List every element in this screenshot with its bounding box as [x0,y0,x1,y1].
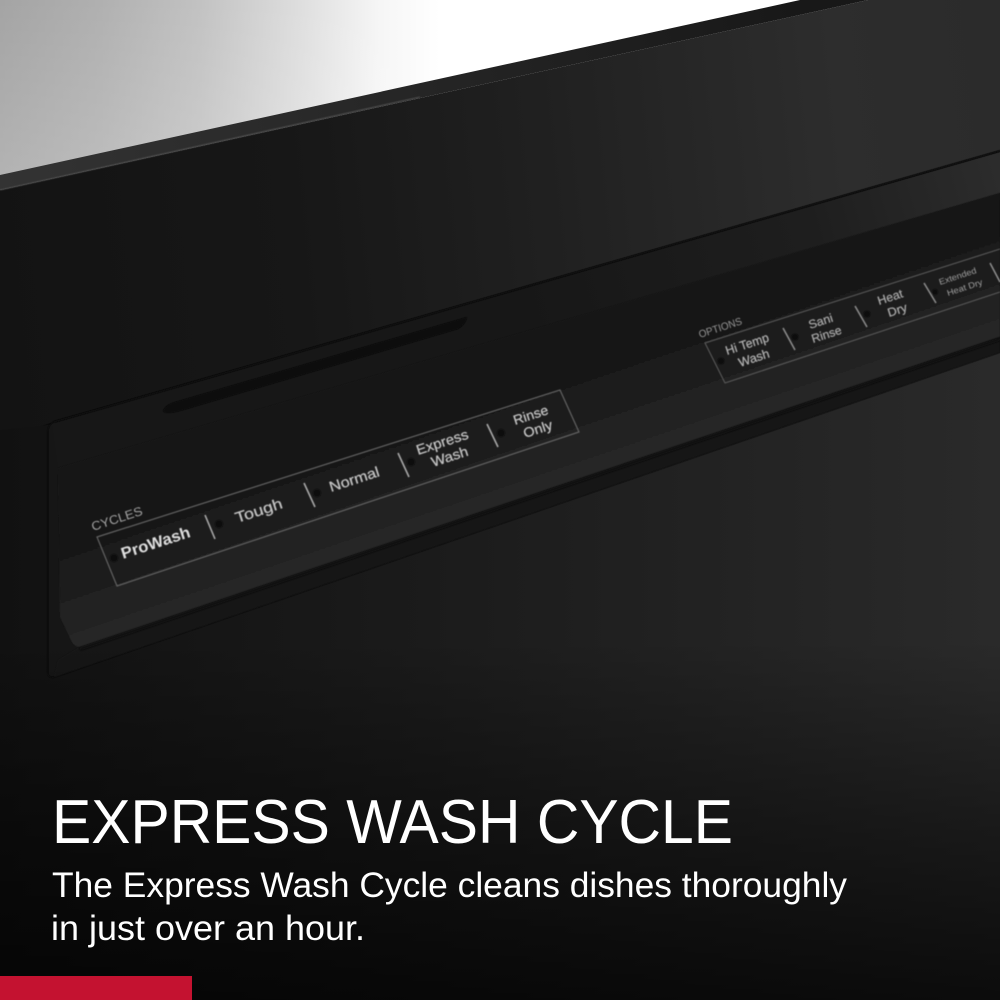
divider [304,483,315,507]
option: Hi Temp Wash [718,331,771,370]
panel: options [698,249,1000,383]
options label: OPTIONS [698,316,744,341]
door top trim [0,0,868,190]
cycle: ProWash: ProWash [119,524,193,563]
option: Heat Dry: Dry [886,300,909,320]
handle slit [163,317,467,413]
description: The Express Wash Cycle cleans dishes thoroughly [52,866,848,905]
panel edge shadow [80,339,1000,649]
divider [398,453,409,477]
option: Extended Heat Dry [932,265,985,298]
description [51,866,848,948]
divider [855,306,867,327]
lip top shadow line [54,151,1000,422]
option: Heat Dry [864,286,909,320]
control panel face [58,193,1000,647]
panel: cycles [90,390,579,586]
cycles label: CYCLES [90,504,144,534]
option: Sani Rinse [792,311,844,346]
option: Hi Temp Wash: Hi Temp [724,331,771,358]
background wall [0,0,1000,200]
title: EXPRESS WASH CYCLE [52,788,733,857]
cycle: Rinse Only: Rinse [511,402,550,428]
cycle: Normal: Normal [327,464,382,496]
control panel frame [48,151,1000,677]
red accent bar [0,976,192,1000]
option: Heat Dry: Heat [876,286,905,308]
option: Extended Heat Dry: Heat Dry [946,277,985,298]
options outline [705,249,1000,383]
cycle: Tough: Tough [233,495,285,527]
lower frame band [54,337,1000,677]
divider [783,328,795,350]
cycle: Express Wash: Wash [429,443,470,470]
control lip [52,152,1000,468]
description: in just over an hour. [51,909,365,948]
cycle: Express Wash: Express [414,426,470,458]
cycle: Express Wash [407,426,470,470]
divider [990,263,1000,282]
divider [924,283,936,303]
divider [487,424,498,447]
divider [205,515,215,539]
bottom dark overlay [0,640,1000,1000]
door lower face [0,330,1000,1000]
option: Hi Temp Wash: Wash [737,347,771,370]
cycle: Tough [215,495,285,528]
cycle: Normal [313,464,382,497]
cycles outline [97,390,579,586]
option: Sani Rinse: Sani [807,311,835,332]
cycle: Rinse Only: Only [521,417,555,441]
option: Sani Rinse: Rinse [810,323,844,346]
option: Extended Heat Dry: Extended [938,265,978,287]
cycle: Rinse Only [497,402,555,441]
door upper face [0,0,1000,440]
